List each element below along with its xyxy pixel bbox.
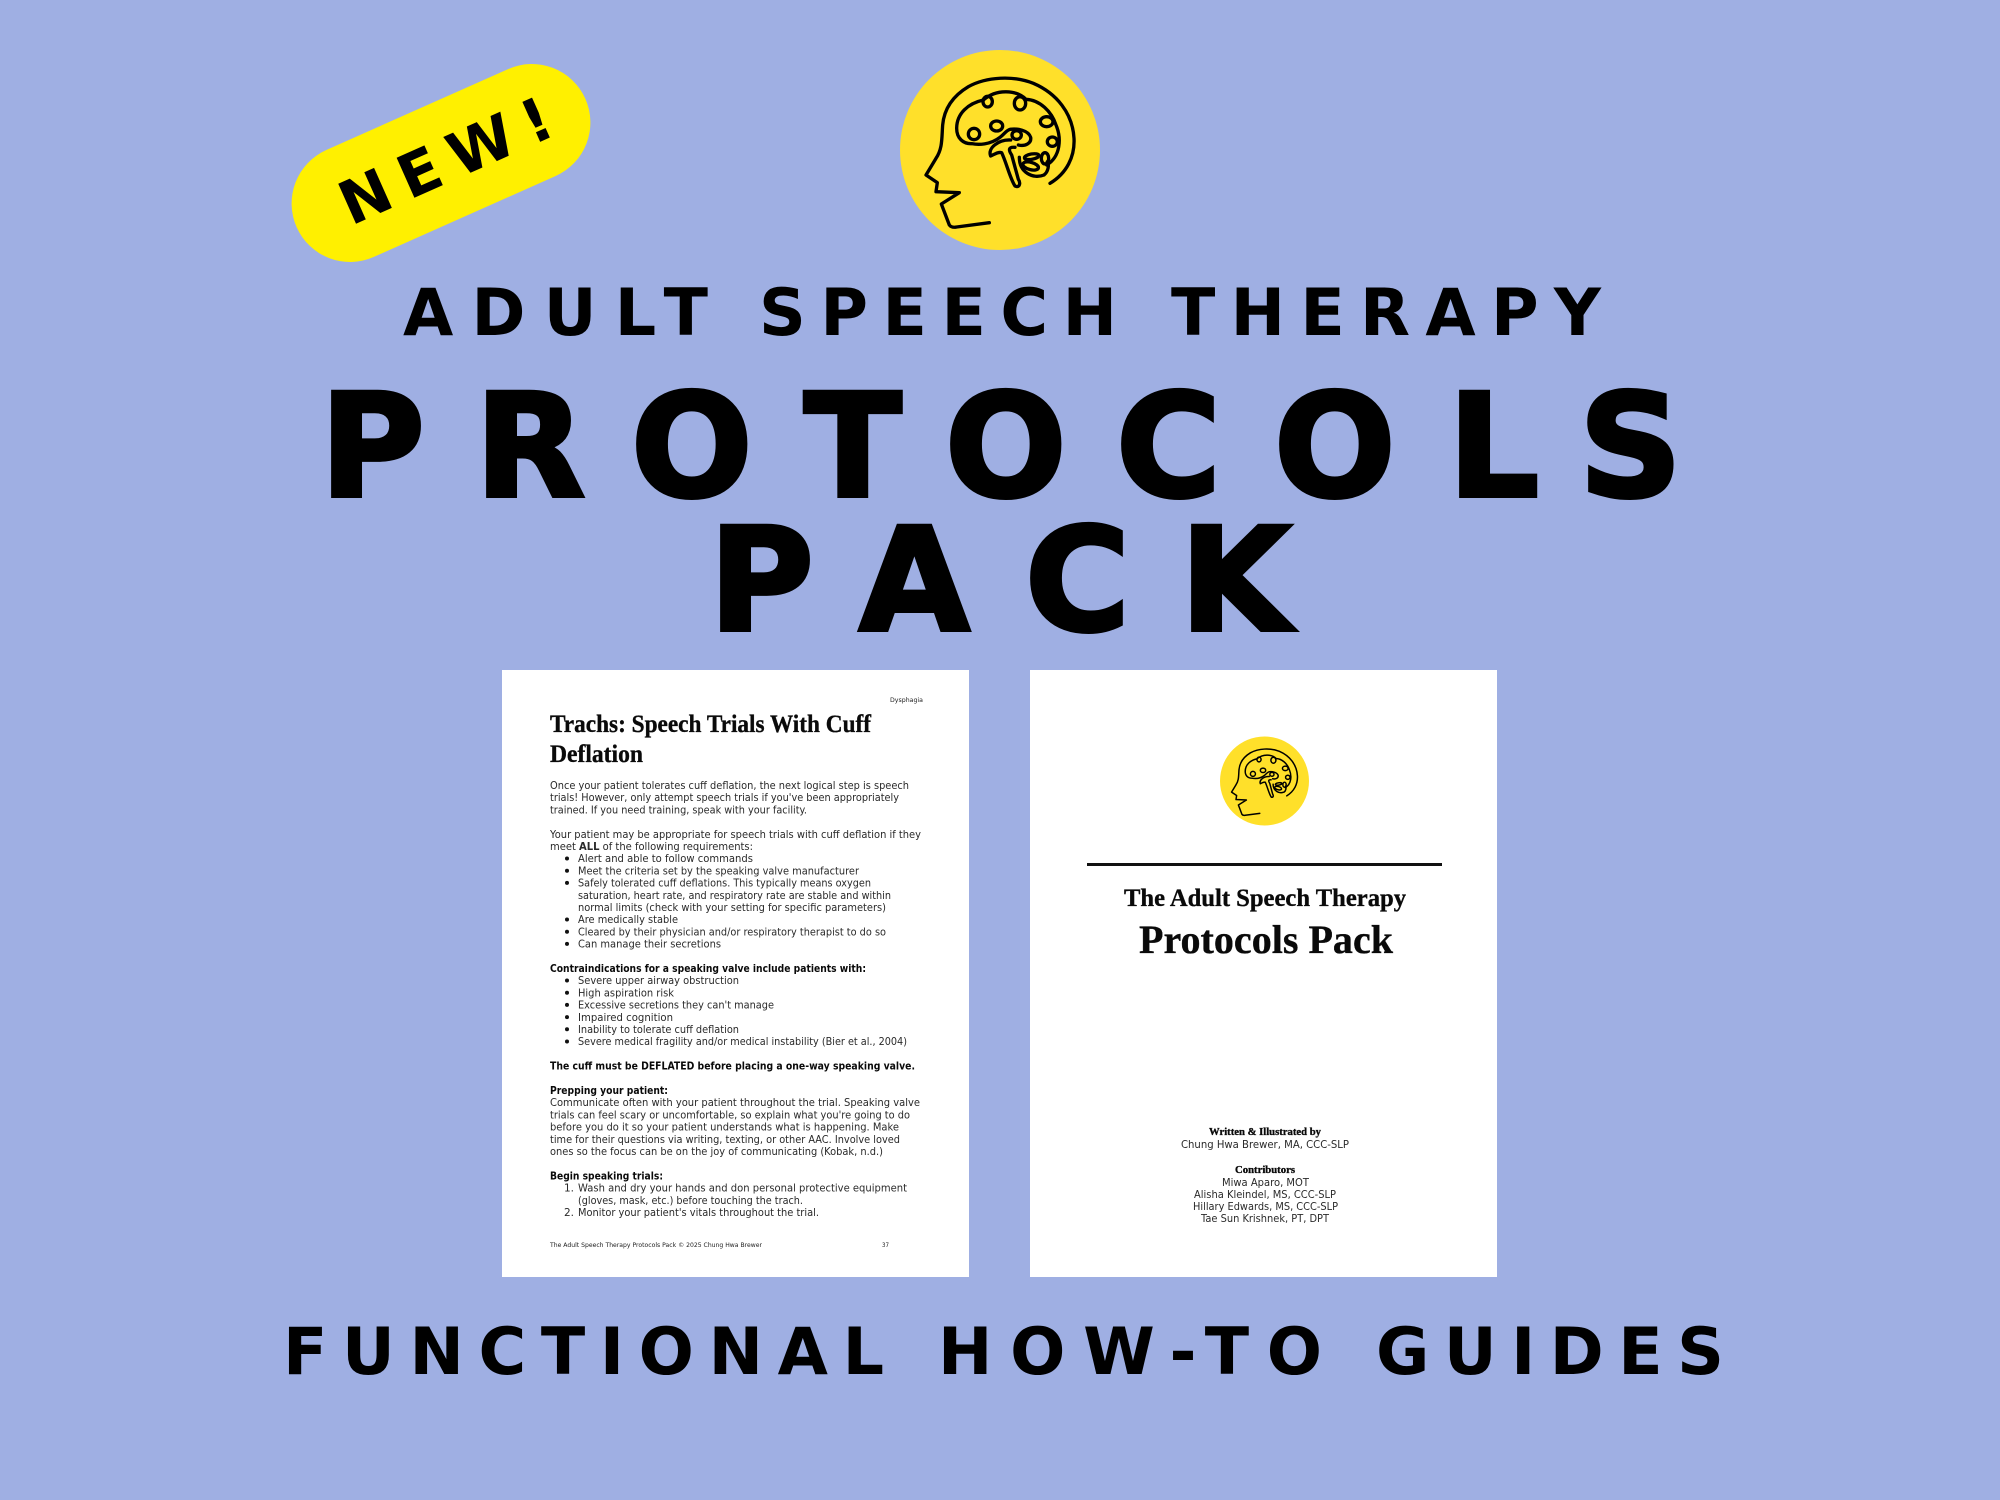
requirements list: Alert and able to follow commands bbox=[578, 853, 753, 865]
contraindications list: Severe upper airway obstruction bbox=[578, 975, 739, 987]
contraindications list: Inability to tolerate cuff deflation bbox=[578, 1024, 739, 1036]
contributors: Hillary Edwards, MS, CCC-SLP bbox=[1193, 1201, 1338, 1213]
tagline: functional how-to guides: FUNCTIONAL bbox=[283, 1315, 884, 1390]
contraindications list: Contraindications for a speaking valve include patients with: bbox=[550, 963, 866, 975]
requirements list: Meet the criteria set by the speaking valve manufacturer bbox=[578, 865, 860, 877]
prepping your patient: ones so the focus can be on the joy of communicating (Kobak, n.d.) bbox=[550, 1146, 883, 1158]
cover title: The Adult Speech Therapy bbox=[1124, 885, 1406, 912]
requirements list: Cleared by their physician and/or respiratory therapist to do so bbox=[578, 926, 886, 938]
contributors: Contributors bbox=[1235, 1164, 1296, 1176]
page footer: The Adult Speech Therapy Protocols Pack © 2025 Chung Hwa Brewer bbox=[549, 1241, 762, 1249]
cuff warning: The cuff must be DEFLATED before placing a one-way speaking valve. bbox=[550, 1061, 915, 1073]
page footer bbox=[549, 1241, 889, 1249]
contributors: Alisha Kleindel, MS, CCC-SLP bbox=[1194, 1189, 1336, 1201]
title: protocols: PROTOCOLS bbox=[320, 363, 1682, 530]
subtitle: adult speech therapy: ADULT bbox=[403, 276, 708, 351]
author credit bbox=[1181, 1126, 1349, 1151]
new badge bbox=[273, 45, 609, 281]
begin speaking trials: 1. bbox=[564, 1183, 574, 1195]
subtitle: adult speech therapy bbox=[403, 276, 1602, 351]
begin speaking trials: Monitor your patient's vitals throughout the trial. bbox=[578, 1207, 819, 1219]
contraindications list: Impaired cognition bbox=[578, 1012, 673, 1024]
intro paragraph: trained. If you need training, speak with your facility. bbox=[550, 804, 807, 816]
contributors bbox=[1193, 1164, 1338, 1225]
requirements list: Your patient may be appropriate for speech trials with cuff deflation if they bbox=[549, 829, 921, 841]
page footer: 37 bbox=[882, 1241, 889, 1249]
cover title bbox=[1124, 885, 1406, 962]
contraindications list: Severe medical fragility and/or medical instability (Bier et al., 2004) bbox=[578, 1036, 907, 1048]
requirements list bbox=[549, 829, 921, 951]
new badge: NEW! bbox=[329, 84, 564, 240]
subtitle: adult speech therapy: THERAPY bbox=[1171, 276, 1602, 351]
author credit: Written & Illustrated by bbox=[1209, 1126, 1321, 1138]
requirements list: Safely tolerated cuff deflations. This typically means oxygen bbox=[578, 878, 871, 890]
panel: sample protocol page bbox=[502, 670, 969, 1277]
icon: cover head with brain bbox=[1220, 736, 1309, 826]
begin speaking trials: Begin speaking trials: bbox=[550, 1170, 663, 1182]
page heading: Trachs: Speech Trials With Cuff bbox=[550, 711, 872, 738]
prepping your patient bbox=[550, 1085, 920, 1158]
begin speaking trials: 2. bbox=[564, 1207, 574, 1219]
tagline: functional how-to guides: GUIDES bbox=[1376, 1315, 1724, 1390]
requirements list: Are medically stable bbox=[578, 914, 678, 926]
tagline: functional how-to guides bbox=[283, 1315, 1724, 1390]
begin speaking trials: Wash and dry your hands and don personal protective equipment bbox=[578, 1183, 907, 1195]
intro paragraph bbox=[550, 780, 909, 816]
page heading bbox=[550, 711, 872, 768]
panel: cover page bbox=[1030, 670, 1497, 1277]
subtitle: adult speech therapy: SPEECH bbox=[759, 276, 1117, 351]
page heading: Deflation bbox=[550, 741, 643, 768]
requirements list: saturation, heart rate, and respiratory rate are stable and within bbox=[578, 890, 891, 902]
contraindications list: High aspiration risk bbox=[578, 987, 675, 999]
tagline: functional how-to guides: HOW-TO bbox=[938, 1315, 1322, 1390]
begin speaking trials bbox=[550, 1170, 907, 1219]
icon: head with brain bbox=[900, 50, 1100, 250]
page section label: Dysphagia bbox=[890, 696, 923, 704]
title: pack: PACK bbox=[709, 497, 1296, 664]
intro paragraph: trials! However, only attempt speech trials if you've been appropriately bbox=[550, 792, 899, 804]
prepping your patient: Communicate often with your patient throughout the trial. Speaking valve bbox=[550, 1097, 920, 1109]
requirements list: normal limits (check with your setting for specific parameters) bbox=[578, 902, 886, 914]
requirements list: meet ALL of the following requirements: bbox=[550, 841, 753, 853]
cover title: Protocols Pack bbox=[1139, 917, 1394, 962]
contributors: Miwa Aparo, MOT bbox=[1222, 1177, 1310, 1189]
prepping your patient: before you do it so your patient understands what is happening. Make bbox=[550, 1122, 899, 1134]
contributors: Tae Sun Krishnek, PT, DPT bbox=[1200, 1213, 1330, 1225]
prepping your patient: time for their questions via writing, texting, or other AAC. Involve loved bbox=[550, 1134, 900, 1146]
author credit: Chung Hwa Brewer, MA, CCC-SLP bbox=[1181, 1139, 1349, 1151]
prepping your patient: trials can feel scary or uncomfortable, so explain what you're going to do bbox=[550, 1109, 910, 1121]
prepping your patient: Prepping your patient: bbox=[550, 1085, 668, 1097]
begin speaking trials: (gloves, mask, etc.) before touching the trach. bbox=[578, 1195, 803, 1207]
contraindications list bbox=[550, 963, 907, 1048]
requirements list: Can manage their secretions bbox=[578, 939, 721, 951]
contraindications list: Excessive secretions they can't manage bbox=[578, 1000, 774, 1012]
intro paragraph: Once your patient tolerates cuff deflation, the next logical step is speech bbox=[550, 780, 909, 792]
